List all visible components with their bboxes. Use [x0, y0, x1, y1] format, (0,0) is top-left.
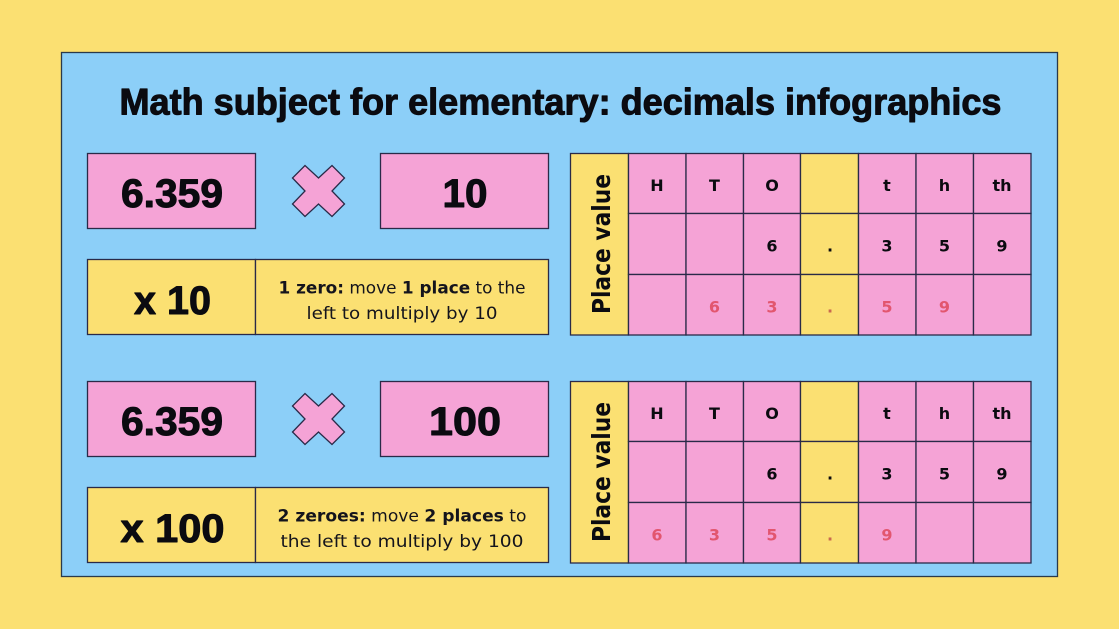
table values: h — [939, 404, 950, 423]
title: Math subject for elementary: decimals infographics — [120, 82, 1002, 122]
table values: t — [883, 404, 891, 423]
table values: 6 — [766, 236, 778, 256]
table values: O — [765, 176, 779, 195]
number box: 6.359 — [88, 382, 256, 456]
table values: 9 — [881, 526, 893, 544]
table values: T — [709, 176, 720, 195]
table values: 3 — [709, 526, 720, 544]
table values: 6 — [766, 464, 778, 484]
panel: multiply by 100 — [88, 382, 548, 562]
panel: place value table for multiply by 100 — [570, 382, 1031, 563]
table label: Place value: Place value — [587, 402, 616, 542]
rule text: move 1 place: left to multiply by 10 — [306, 304, 498, 324]
rule text: move 2 places: 2 zeroes: move 2 places to — [278, 506, 526, 526]
table values: 9 — [996, 236, 1008, 256]
table values: t — [883, 176, 891, 195]
table values: 5 — [939, 464, 950, 484]
table values: H — [650, 404, 664, 423]
rule text: move 1 place: 1 zero: move 1 place to the — [278, 278, 526, 298]
table values: H — [650, 176, 664, 195]
number box: 100: 100 — [429, 400, 501, 444]
panel: place value table for multiply by 10 — [570, 154, 1031, 335]
table cells — [570, 154, 1031, 335]
icon: multiplication cross — [292, 166, 344, 216]
number box: 10: 10 — [442, 172, 488, 216]
label box: x 100 — [88, 488, 256, 562]
table values: . — [827, 236, 833, 256]
label box: x 100: x 100 — [120, 507, 224, 551]
table values: 3 — [881, 464, 893, 484]
table values: 3 — [881, 236, 893, 256]
table values: 3 — [766, 298, 778, 316]
table values: T — [709, 404, 720, 423]
table values: O — [765, 404, 779, 423]
table values: 5 — [881, 298, 893, 316]
table values: 6 — [651, 526, 663, 544]
table values: 5 — [939, 236, 950, 256]
table values: 5 — [766, 526, 778, 544]
number box: 10 — [380, 154, 548, 228]
table values: . — [827, 526, 833, 544]
table values: th — [992, 404, 1012, 423]
panel: main blue background — [62, 52, 1058, 576]
rule text: move 1 place — [256, 260, 548, 334]
table values: h — [939, 176, 950, 195]
label box: x 10: x 10 — [134, 279, 211, 323]
number box: 6.359 — [88, 154, 256, 228]
rule text: move 2 places — [256, 488, 548, 562]
rule text: move 2 places: the left to multiply by 100 — [280, 532, 524, 552]
panel: multiply by 10 — [88, 154, 548, 334]
table values: . — [827, 464, 833, 484]
table values — [650, 404, 1012, 544]
number box: 6.359: 6.359 — [121, 400, 223, 444]
number box: 6.359: 6.359 — [121, 172, 223, 216]
table values: . — [827, 298, 833, 316]
table values — [650, 176, 1012, 316]
table values: 9 — [996, 464, 1008, 484]
number box: 100 — [380, 382, 548, 456]
icon: multiplication cross — [292, 394, 344, 444]
table cells — [570, 382, 1031, 563]
table values: 9 — [939, 298, 950, 316]
table label: Place value: Place value — [587, 174, 616, 314]
table values: 6 — [709, 298, 720, 316]
table values: th — [992, 176, 1012, 195]
label box: x 10 — [88, 260, 256, 334]
